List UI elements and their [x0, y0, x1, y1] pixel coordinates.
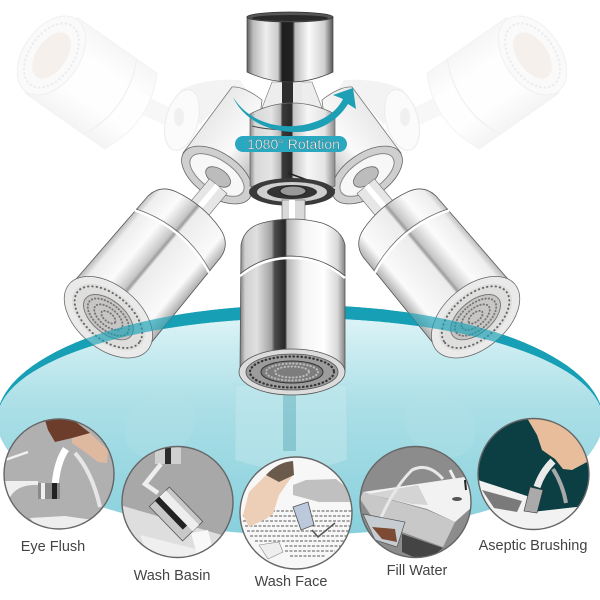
top connector cylinder — [247, 12, 333, 82]
panel: wash face — [238, 455, 354, 573]
counter — [479, 480, 578, 529]
sink — [3, 452, 93, 532]
hand — [372, 527, 397, 542]
label: eye flush: Eye Flush — [21, 539, 85, 555]
face — [243, 475, 293, 527]
rotation badge: 1080° Rotation — [247, 136, 340, 152]
sink — [360, 476, 472, 562]
faded right aerator position — [334, 2, 582, 155]
center aerator — [239, 200, 345, 395]
basin rim over side aerators — [0, 305, 600, 420]
water jet — [537, 461, 566, 503]
water — [191, 530, 212, 553]
faucet — [524, 487, 543, 513]
background wall — [293, 479, 352, 502]
right angled aerator — [326, 153, 535, 374]
label: aseptic brushing: Aseptic Brushing — [479, 538, 587, 554]
water stream — [55, 449, 100, 507]
label: fill water: Fill Water — [387, 563, 448, 579]
left angled aerator — [49, 153, 258, 374]
cup — [363, 514, 405, 547]
basin surface — [122, 506, 221, 549]
aerator — [149, 487, 203, 541]
panel: fill water — [358, 445, 474, 562]
glass basin — [0, 305, 600, 535]
label: wash basin: Wash Basin — [134, 568, 210, 584]
panel: aseptic brushing — [476, 416, 592, 535]
faucet stub — [155, 446, 181, 464]
water arc and faucet — [380, 466, 467, 518]
panel: eye flush — [3, 418, 115, 530]
hair — [266, 461, 294, 482]
left elbow joint — [172, 87, 262, 216]
faucet — [38, 483, 60, 499]
faded left aerator position — [2, 2, 250, 155]
panel: wash basin — [120, 445, 236, 561]
label: wash face: Wash Face — [255, 574, 327, 590]
cup — [293, 502, 314, 530]
basin reflection of aerator — [112, 379, 488, 471]
central swivel joint — [249, 82, 335, 206]
skin and hair — [45, 419, 108, 463]
swivel arm — [145, 464, 161, 493]
hand — [259, 542, 283, 559]
right elbow joint — [322, 87, 412, 216]
rotation arrow — [233, 88, 356, 132]
water spray — [243, 511, 352, 556]
face — [528, 419, 587, 470]
